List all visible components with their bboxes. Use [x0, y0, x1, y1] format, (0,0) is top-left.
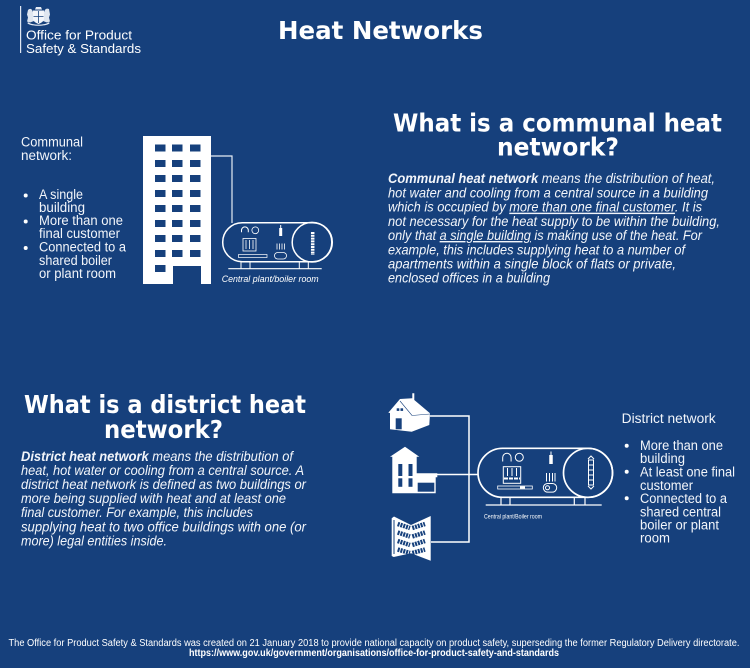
heading: communal heat network: network?: [497, 132, 619, 162]
panel: district network list: shared central: [640, 504, 721, 520]
text block: district definition: [21, 448, 307, 549]
icon: town house: [390, 447, 437, 493]
icon: district boiler: [478, 448, 612, 505]
panel: district network list: District network: [622, 411, 716, 426]
panel: district network list: More than one: [640, 438, 723, 453]
text block: district definition: supplying heat to two office buildings with one (or: [21, 519, 307, 535]
heading: district heat network: [24, 390, 306, 444]
icon: communal boiler: [223, 222, 332, 269]
panel: communal network list: building: [39, 200, 85, 215]
text block: district definition: final customer. For example, this includes: [21, 504, 253, 520]
panel: district network list: Connected to a: [640, 491, 727, 506]
panel: communal network list: A single: [39, 187, 83, 202]
text block: communal definition: not necessary for the heat supply to be within the building,: [388, 213, 720, 229]
panel: district network list: boiler or plant: [640, 518, 719, 532]
icon: house: [388, 393, 430, 432]
icon: royal crest: [27, 7, 50, 26]
icon: office block: [392, 516, 431, 561]
panel: communal network list: or plant room: [39, 266, 116, 281]
panel: district network list: room: [640, 530, 670, 546]
panel: district network list: [622, 411, 735, 546]
panel: district network list: building: [640, 451, 685, 466]
icon: tower block: [143, 136, 211, 284]
heading: communal heat network: [393, 108, 722, 162]
logo: Office for Product Safety & Standards: [20, 6, 141, 56]
panel: district network list: At least one final: [640, 464, 735, 480]
heading: district heat network: What is a district heat: [24, 390, 306, 419]
footer note: [8, 638, 740, 659]
text block: communal definition: enclosed offices in a building: [388, 270, 550, 286]
panel: communal network list: final customer: [39, 226, 120, 241]
logo: Office for Product Safety & Standards: Office for Product: [26, 28, 133, 42]
logo: Office for Product Safety & Standards: Safety & Standards: [26, 42, 141, 56]
heading: communal heat network: What is a communal heat: [393, 108, 722, 138]
text block: communal definition: only that a single building is making use of the heat. For: [388, 227, 703, 243]
caption: district plant: Central plant/Boiler room: [484, 514, 542, 520]
footer note: https://www.gov.uk/government/organisations/office-for-product-safety-and-standards: [189, 648, 559, 659]
connector: tower to plant: [211, 156, 232, 223]
text block: district definition: heat, hot water or cooling from a central source. A: [21, 462, 304, 478]
text block: district definition: district heat network is defined as two buildings or: [21, 476, 307, 492]
text block: communal definition: hot water and cooling from a central source in a building: [388, 184, 708, 200]
heading: district heat network: network?: [104, 415, 223, 444]
panel: communal network list: Communal: [21, 134, 83, 150]
text block: district definition: more) legal entities inside.: [21, 533, 167, 549]
title: Heat Networks: [278, 16, 483, 45]
text block: district definition: more being supplied with heat and at least one: [21, 490, 286, 506]
panel: communal network list: shared boiler: [39, 253, 112, 268]
text block: communal definition: apartments within a single block of flats or private,: [388, 256, 676, 272]
text block: communal definition: Communal heat network means the distribution of heat,: [388, 170, 715, 186]
caption: communal plant: Central plant/boiler room: [222, 274, 319, 284]
panel: communal network list: Connected to a: [39, 240, 126, 254]
panel: communal network list: More than one: [39, 213, 123, 228]
text block: communal definition: [388, 170, 720, 286]
text block: district definition: District heat network means the distribution of: [21, 448, 295, 464]
panel: communal network list: network:: [21, 148, 72, 163]
text block: communal definition: example, this includes supplying heat to a number of: [388, 241, 687, 257]
connector: buildings to plant: [430, 416, 478, 542]
panel: district network list: customer: [640, 478, 693, 493]
panel: communal network list: [21, 134, 126, 281]
text block: communal definition: which is occupied by more than one final customer. It is: [388, 199, 702, 215]
